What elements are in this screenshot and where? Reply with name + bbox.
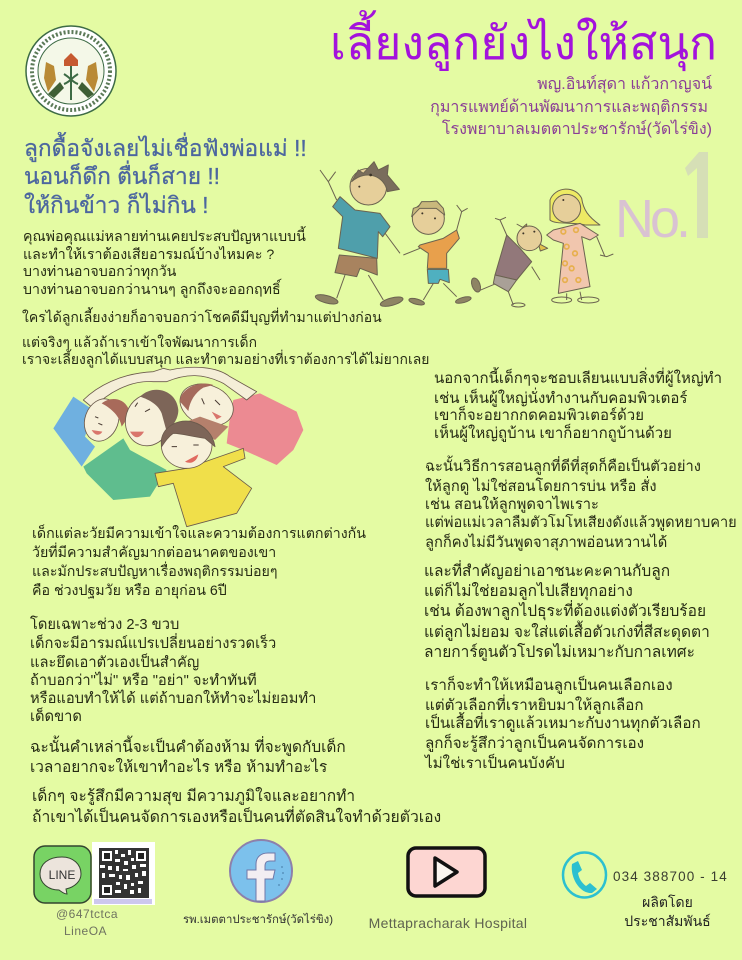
text: age groups: เด็กแต่ละวัยมีความเข้าใจและความต้องการแตกต่างกัน [32, 526, 366, 542]
headline: นอนก็ดึก ตื่นก็สาย !! [24, 163, 220, 189]
text: imitation: นอกจากนี้เด็กๆจะชอบเลียนแบบสิ่งที่ผู้ใหญ่ทำ [434, 370, 722, 387]
title: เลี้ยงลูกยังไงให้สนุก [330, 17, 717, 69]
text: imitation: เช่น เห็นผู้ใหญ่นั่งทำงานกับคอมพิวเตอร์ [434, 390, 687, 407]
text: best teaching: ฉะนั้นวิธีการสอนลูกที่ดีที่สุดก็คือเป็นตัวอย่าง [425, 459, 701, 475]
text: do not argue: และที่สำคัญอย่าเอาชนะคะคานกับลูก [424, 563, 670, 580]
text: do not argue: ลายการ์ตูนตัวโปรดไม่เหมาะกับกาลเทศะ [424, 644, 695, 661]
text: imitation: เห็นผู้ใหญ่ถูบ้าน เขาก็อยากถูบ้านด้วย [434, 425, 672, 442]
text: children feel happy [32, 786, 441, 826]
produced by [624, 894, 711, 929]
LINE account label [56, 907, 118, 938]
text: best teaching: เช่น สอนให้ลูกพูดจาไพเราะ [425, 497, 599, 513]
LINE account label: @647tctca [56, 907, 118, 921]
intro text: บางท่านอาจบอกว่าทุกวัน [23, 264, 176, 280]
text: children feel happy: เด็กๆ จะรู้สึกมีความสุข มีความภูมิใจและอยากทำ [32, 788, 355, 805]
text: ages 2-3: และยึดเอาตัวเองเป็นสำคัญ [30, 655, 199, 671]
icon: LINE: LINE [49, 868, 75, 882]
text: do not argue: แต่ก็ไม่ใช่ยอมลูกไปเสียทุกอย่าง [424, 583, 633, 600]
produced by: ประชาสัมพันธ์ [624, 913, 711, 929]
intro text [23, 226, 306, 298]
icon: Facebook [229, 839, 293, 903]
intro text: คุณพ่อคุณแม่หลายท่านเคยประสบปัญหาแบบนี้ [23, 229, 306, 245]
text: ages 2-3: โดยเฉพาะช่วง 2-3 ขวบ [30, 617, 179, 633]
headline: ให้กินข้าว ก็ไม่กิน ! [24, 192, 209, 218]
illustration: children in a huddle [53, 366, 304, 528]
text: children feel happy: ถ้าเขาได้เป็นคนจัดการเองหรือเป็นคนที่ตัดสินใจทำด้วยตัวเอง [32, 809, 441, 826]
phone number: 034 388700 - 14 [613, 869, 728, 884]
author credits: พญ.อินท์สุดา แก้วกาญจน์ [537, 76, 712, 93]
text: ages 2-3: หรือแอบทำให้ได้ แต่ถ้าบอกให้ทำจะไม่ยอมทำ [30, 691, 316, 707]
Facebook label: รพ.เมตตาประชารักษ์(วัดไร่ขิง) [183, 914, 333, 926]
author credits: กุมารแพทย์ด้านพัฒนาการและพฤติกรรม [430, 99, 708, 116]
text: best teaching: แต่พ่อแม่เวลาลืมตัวโมโหเสียงดังแล้วพูดหยาบคาย [425, 515, 737, 531]
author credits [430, 74, 712, 138]
text: imitation [434, 367, 722, 442]
text: understanding development [22, 334, 429, 368]
text: best teaching: ลูกก็คงไม่มีวันพูดจาสุภาพอ่อนหวานได้ [425, 535, 667, 551]
text: forbidden words: ฉะนั้นคำเหล่านี้จะเป็นคำต้องห้าม ที่จะพูดกับเด็ก [30, 739, 346, 756]
icon: YouTube [406, 846, 487, 898]
text: ages 2-3: ถ้าบอกว่า"ไม่" หรือ "อย่า" จะทำทันที [30, 673, 257, 689]
text: do not argue: แต่ลูกไม่ยอม จะใส่แต่เสื้อตัวเก่งที่สีสะดุดตา [424, 624, 710, 641]
headline: ลูกดื้อจังเลยไม่เชื่อฟังพ่อแม่ !! [24, 135, 307, 161]
intro text: บางท่านอาจบอกว่านานๆ ลูกถึงจะออกฤทธิ์ [23, 282, 281, 298]
icon: phone [562, 851, 608, 899]
text: understanding development: เราจะเลี้ยงลูกได้แบบสนุก และทำตามอย่างที่เราต้องการได้ไม่ยากเลย [22, 351, 429, 367]
No.1 watermark: No. [615, 189, 687, 249]
hospital logo [25, 25, 117, 117]
text: age groups: และมักประสบปัญหาเรื่องพฤติกรรมบ่อยๆ [32, 564, 277, 580]
text: do not argue [424, 560, 710, 661]
text: best teaching: ให้ลูกดู ไม่ใช่สอนโดยการบ่น หรือ สั่ง [425, 479, 657, 495]
headline [24, 132, 307, 218]
produced by: ผลิตโดย [642, 894, 693, 910]
text: forbidden words: เวลาอยากจะให้เขาทำอะไร หรือ ห้ามทำอะไร [30, 759, 327, 776]
text: age groups [32, 524, 366, 599]
numeral 1 watermark [685, 152, 708, 238]
text: let child choose: เป็นเสื้อที่เราดูแล้วเหมาะกับงานทุกตัวเลือก [425, 715, 701, 732]
text: age groups: คือ ช่วงปฐมวัย หรือ อายุก่อน 6ปี [32, 583, 227, 599]
text: imitation: เขาก็จะอยากกดคอมพิวเตอร์ด้วย [434, 407, 644, 424]
LINE account label: LineOA [64, 924, 107, 938]
text: let child choose: ลูกก็จะรู้สึกว่าลูกเป็นคนจัดการเอง [425, 735, 644, 752]
text: let child choose: แต่ตัวเลือกที่เราหยิบมาให้ลูกเลือก [425, 697, 644, 714]
text: ages 2-3: เด็ดขาด [30, 709, 82, 725]
text: forbidden words [30, 736, 346, 776]
text: ages 2-3: เด็กจะมีอารมณ์แปรเปลี่ยนอย่างรวดเร็ว [30, 636, 276, 652]
YouTube label: Mettapracharak Hospital [369, 915, 527, 931]
text: age groups: วัยที่มีความสำคัญมากต่ออนาคตของเขา [32, 545, 276, 561]
text: let child choose: เราก็จะทำให้เหมือนลูกเป็นคนเลือกเอง [425, 677, 673, 694]
intro text: และทำให้เราต้องเสียอารมณ์บ้างไหมคะ ? [23, 247, 274, 263]
QR code [92, 842, 155, 905]
icon: LINE [33, 845, 92, 904]
text: lucky parents: ใครได้ลูกเลี้ยงง่ายก็อาจบอกว่าโชคดีมีบุญที่ทำมาแต่ปางก่อน [22, 309, 382, 325]
text: let child choose: ไม่ใช่เราเป็นคนบังคับ [425, 755, 565, 772]
author credits: โรงพยาบาลเมตตาประชารักษ์(วัดไร่ขิง) [442, 121, 712, 138]
illustration: family [314, 161, 614, 308]
text: best teaching [425, 456, 737, 551]
text: do not argue: เช่น ต้องพาลูกไปธุระที่ต้องแต่งตัวเรียบร้อย [424, 603, 706, 620]
text: let child choose [424, 676, 701, 772]
text: understanding development: แต่จริงๆ แล้วถ้าเราเข้าใจพัฒนาการเด็ก [22, 334, 257, 350]
text: ages 2-3 [30, 616, 316, 725]
